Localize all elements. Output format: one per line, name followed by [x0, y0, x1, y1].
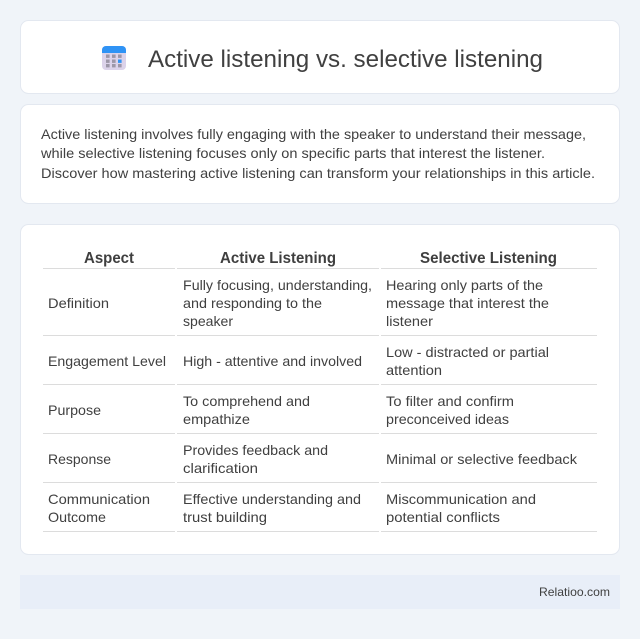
- table row: purpose: empathize: [183, 411, 250, 427]
- table row: communication outcome: Communication: [48, 491, 150, 507]
- table row: response: Provides feedback and: [183, 442, 328, 458]
- table row: definition: Fully focusing, understanding,: [183, 277, 372, 293]
- table header: Aspect: [84, 250, 135, 267]
- table row: purpose: To comprehend and: [183, 393, 310, 409]
- table row: communication outcome: [48, 491, 536, 525]
- text block: introduction: Discover how mastering active listening can transform your relationships in this article.: [41, 165, 595, 181]
- footer credit: Relatioo.com: [539, 585, 610, 599]
- table row: communication outcome: trust building: [183, 509, 267, 525]
- text block: introduction: Active listening involves fully engaging with the speaker to understand their message,: [41, 126, 586, 142]
- icon: calendar: [102, 46, 126, 70]
- table row: definition: message that interest the: [386, 295, 549, 311]
- text block: introduction: [40, 126, 595, 181]
- table row: engagement level: attention: [386, 362, 442, 378]
- table row: purpose: preconceived ideas: [386, 411, 509, 427]
- table row: engagement level: [48, 344, 549, 378]
- table row: communication outcome: Miscommunication and: [386, 491, 536, 507]
- table row: purpose: To filter and confirm: [386, 393, 514, 409]
- table header: [84, 250, 557, 267]
- table row: engagement level: Low - distracted or partial: [386, 344, 549, 360]
- table row: definition: speaker: [183, 313, 233, 329]
- table row: definition: Definition: [48, 295, 109, 311]
- table row: response: clarification: [183, 460, 258, 476]
- table header: Active Listening: [220, 250, 336, 267]
- panel: introduction: [20, 104, 620, 204]
- title: Active listening vs. selective listening: [148, 46, 543, 73]
- panel: title card: [20, 20, 620, 94]
- table row: response: Response: [48, 451, 111, 467]
- table row: engagement level: High - attentive and involved: [183, 353, 362, 369]
- table row: response: [48, 442, 578, 476]
- table row: definition: and responding to the: [183, 295, 322, 311]
- table row: definition: Hearing only parts of the: [386, 277, 543, 293]
- table row: purpose: Purpose: [48, 402, 101, 418]
- table row: purpose: [48, 393, 514, 427]
- table header: Selective Listening: [420, 250, 557, 267]
- table row: communication outcome: Outcome: [48, 509, 106, 525]
- table row: engagement level: Engagement Level: [48, 353, 166, 369]
- panel: comparison table: [20, 224, 620, 554]
- table row: response: Minimal or selective feedback: [386, 451, 578, 467]
- footer: [20, 575, 620, 609]
- table row: communication outcome: Effective understanding and: [183, 491, 361, 507]
- table row: definition: listener: [386, 313, 433, 329]
- text block: introduction: while selective listening focuses only on specific parts that interest the listener.: [40, 145, 545, 161]
- table row: definition: [48, 277, 549, 329]
- table row: communication outcome: potential conflicts: [386, 509, 500, 525]
